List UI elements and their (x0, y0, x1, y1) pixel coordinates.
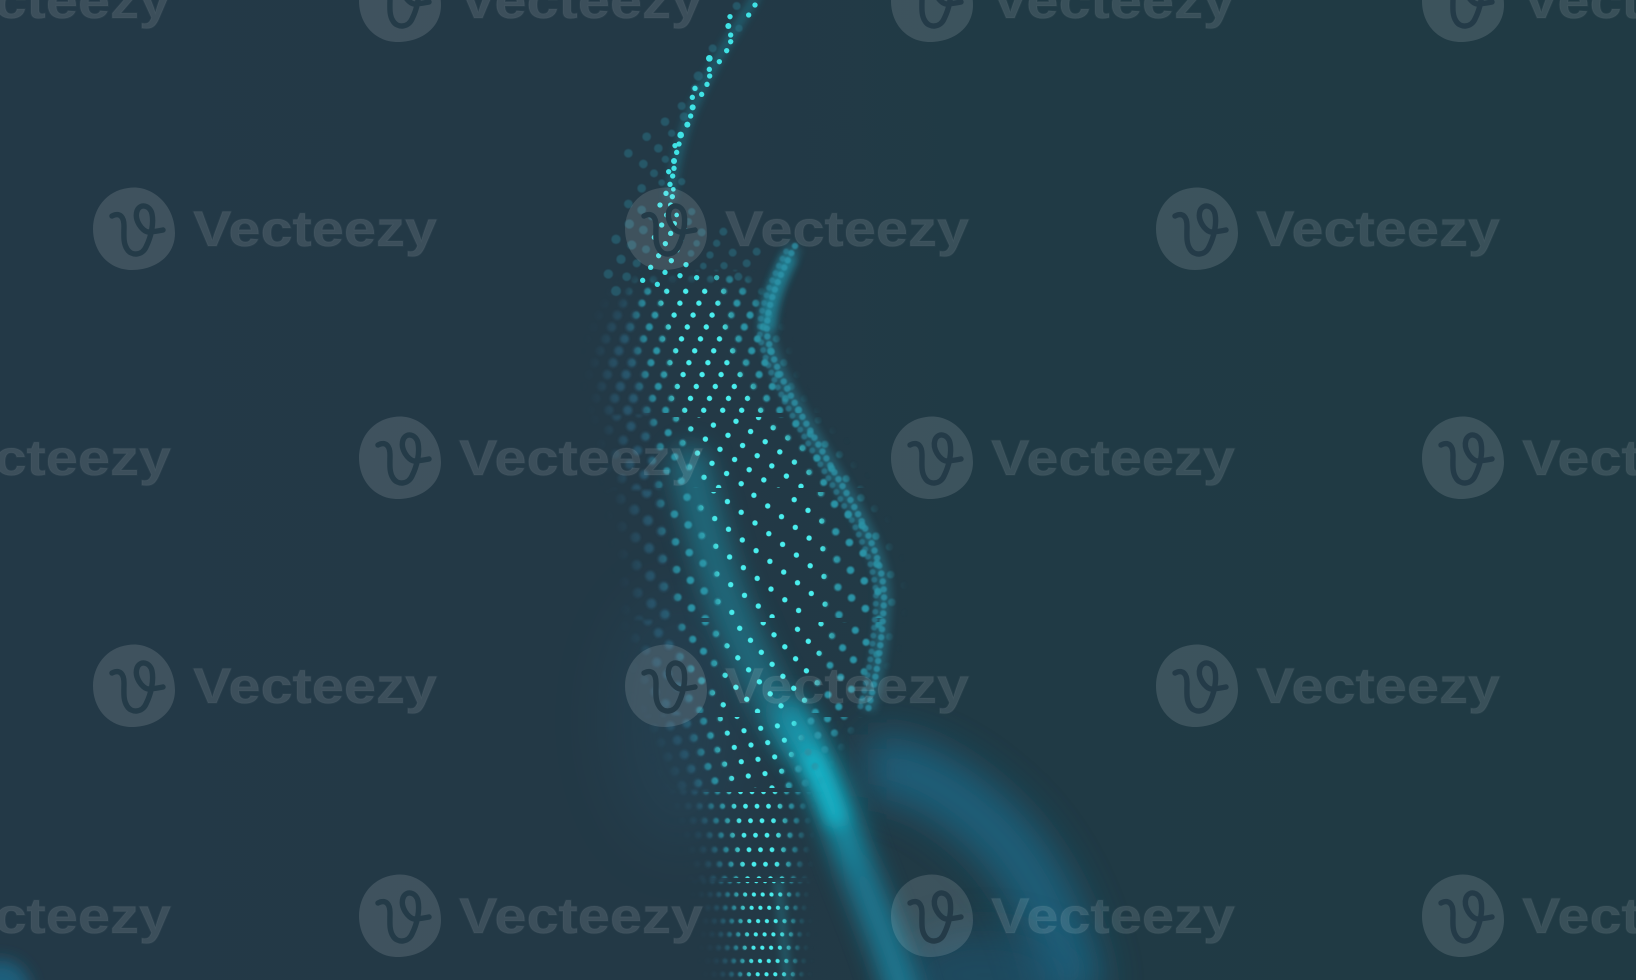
top strand bright dots (640, 2, 758, 287)
watermark row 4, centre (625, 645, 969, 727)
watermark row 4, left: Vecteezy (193, 658, 437, 714)
top strand glow (670, 0, 757, 200)
right blue blurred ribbon (868, 765, 1075, 980)
watermark row 2, left: Vecteezy (193, 201, 437, 257)
watermark row 3, centre left (359, 417, 703, 499)
watermark row 2, left (93, 188, 437, 270)
corner glow bottom left (0, 960, 30, 980)
watermark row 4, centre: Vecteezy (725, 658, 969, 714)
wave surface: sharp bright dots (648, 288, 838, 976)
watermark row 2, right: Vecteezy (1256, 201, 1500, 257)
watermark row 3, centre right: Vecteezy (991, 430, 1235, 486)
watermark row 3, centre left: Vecteezy (459, 430, 703, 486)
watermark row 4, right (1156, 645, 1500, 727)
watermark row 5, centre right: Vecteezy (991, 888, 1235, 944)
watermark row 5, centre left (359, 875, 703, 957)
upper right edge ribbon (760, 246, 884, 710)
wave surface: large out-of-focus dots (598, 300, 733, 977)
watermark row 1, centre right (891, 0, 1235, 42)
faint glow behind wave (610, 590, 750, 850)
watermark row 1, right (1422, 0, 1636, 42)
watermark row 4, right: Vecteezy (1256, 658, 1500, 714)
watermark row 1, centre left (359, 0, 703, 42)
watermark row 4, left (93, 645, 437, 727)
watermark row 3, right (1422, 417, 1636, 499)
watermark row 5, centre left: Vecteezy (459, 888, 703, 944)
watermark row 5, centre right (891, 875, 1235, 957)
watermark row 3, centre right (891, 417, 1235, 499)
watermark row 2, right (1156, 188, 1500, 270)
watermark row 2, centre (625, 188, 969, 270)
centre bright ribbon (690, 465, 905, 980)
watermark row 2, centre: Vecteezy (725, 201, 969, 257)
wave surface: mid-focus dots (626, 270, 896, 978)
watermark row 5, right (1422, 875, 1636, 957)
top strand soft dots (604, 2, 761, 296)
bottom edge dot band (778, 880, 788, 980)
